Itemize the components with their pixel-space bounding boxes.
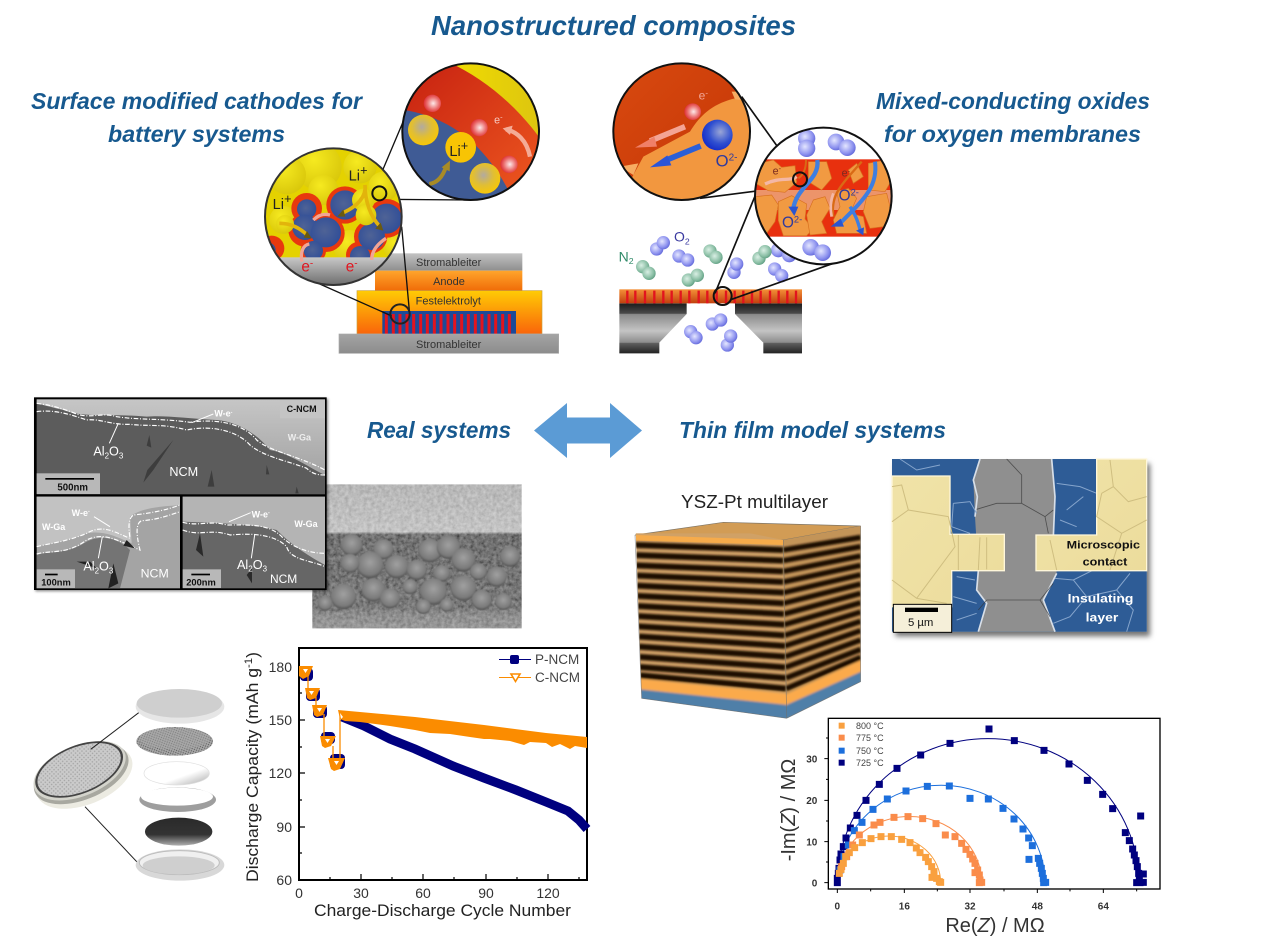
white separator dome: [144, 762, 209, 785]
top micrograph: W-e: [214, 409, 231, 419]
illustration: exploded coin cell: [24, 689, 224, 881]
battery layer stack: Stromableiter: [416, 339, 482, 351]
bottom-left micrograph: W-e: [72, 508, 88, 518]
top micrograph: C-NCM: [287, 404, 317, 414]
legend: 750 °C: [856, 746, 884, 756]
x axis tick labels: [835, 901, 1109, 912]
y axis tick labels: 120: [269, 765, 292, 781]
series 775 C: [839, 814, 985, 886]
magnified circle: membrane cross section: O: [782, 215, 794, 232]
top face: [635, 522, 861, 540]
plot frame and ticks: [299, 648, 587, 880]
x axis title: Re(Z) / MΩ: [945, 915, 1045, 937]
y axis tick labels: 60: [276, 872, 292, 888]
front face stripes: [633, 533, 788, 720]
y axis title: -Im(Z) / MΩ: [778, 759, 800, 861]
membrane layer: [619, 289, 802, 303]
bottom-left micrograph: 2: [95, 566, 100, 575]
magnifier ring on membrane: [714, 287, 732, 305]
plot frame and ticks: [824, 718, 1160, 893]
magnified circle: composite cathode: -: [354, 259, 358, 270]
label: insulating layer: [1068, 592, 1133, 624]
top micrograph: 3: [119, 451, 124, 460]
bottom-right micrograph: [183, 497, 325, 588]
diagram: oxygen membrane: [610, 60, 893, 353]
x axis tick labels: 30: [353, 885, 369, 901]
heading: surface modified cathodes: [31, 88, 363, 147]
y axis title: -1: [243, 658, 255, 668]
legend: C-NCM: [535, 670, 580, 685]
side face stripes: [782, 525, 862, 722]
fit curves: [837, 739, 1139, 883]
bottom-right micrograph: 2: [248, 565, 253, 574]
magnified circle: membrane cross section: e: [773, 165, 779, 177]
battery layer stack: Stromableiter: [416, 257, 482, 269]
y axis tick labels: 90: [276, 819, 292, 835]
bottom-left micrograph: -: [88, 509, 90, 515]
legend: P-NCM: [535, 652, 579, 667]
x axis tick labels: 32: [964, 901, 976, 912]
membrane support: [619, 303, 802, 353]
magnified circle: membrane cross section: -: [779, 164, 782, 173]
left gold contact: [892, 476, 1004, 607]
dark electrode disc: [145, 818, 212, 846]
magnified circle: particle surface detail: Li: [449, 144, 461, 160]
label: insulating layer: Insulating: [1068, 592, 1133, 606]
heading: surface modified cathodes: battery systems: [108, 121, 285, 147]
x axis tick labels: 64: [1098, 901, 1109, 912]
small magnifier ring on cathode: [372, 186, 386, 200]
magnified circle: composite cathode: e: [346, 258, 354, 275]
magnified circle: composite cathode: Li: [349, 169, 360, 185]
legend: 800 °C: [856, 721, 884, 731]
subheading: real systems: Real systems: [367, 417, 511, 443]
top micrograph: O: [109, 445, 119, 459]
top micrograph: NCM: [169, 465, 198, 479]
y axis tick labels: 180: [269, 659, 292, 675]
bottom-right micrograph: NCM: [270, 572, 297, 586]
bottom-left micrograph: [37, 497, 180, 588]
subheading: thin film model systems: Thin film model systems: [679, 417, 946, 443]
label: microscopic contact: Microscopic: [1067, 539, 1140, 551]
scale bar 5 µm: [893, 604, 952, 632]
magnified circle: particle surface detail: +: [461, 139, 468, 153]
label: insulating layer: layer: [1086, 610, 1119, 624]
magnified circle: membrane cross section: [753, 128, 893, 264]
magnified circle: particle surface detail: e: [494, 114, 500, 126]
y axis tick labels: 150: [269, 712, 292, 728]
magnified circle: composite cathode: Li: [273, 197, 284, 213]
panel: TEM micrographs C-NCM: [34, 397, 327, 590]
magnified circle: oxide ion transport: 2-: [729, 153, 738, 164]
x axis tick labels: 0: [295, 885, 303, 901]
top micrograph: 2: [105, 451, 110, 460]
diagram: solid state battery cathode: [259, 60, 559, 353]
x axis tick labels: 48: [1032, 901, 1043, 912]
gas molecules: 2: [629, 256, 634, 266]
P-NCM series: [300, 668, 587, 829]
gas molecules: O: [674, 229, 685, 245]
y axis title: ): [243, 652, 262, 658]
magnified circle: composite cathode: +: [360, 164, 367, 178]
battery layer stack: [339, 253, 559, 353]
bottom-left micrograph: O: [99, 560, 109, 574]
series 725 C: [834, 726, 1146, 886]
battery layer stack: Anode: [433, 276, 465, 288]
illustration: multilayer cube: [633, 522, 862, 722]
x axis tick labels: 60: [415, 885, 431, 901]
x axis tick labels: 16: [899, 901, 910, 912]
y axis tick labels: [269, 659, 292, 888]
mesh spacer: [136, 727, 213, 756]
zoom connector lines: [317, 113, 470, 316]
small magnifier ring in cross section: [793, 172, 807, 186]
bottom-left micrograph: Al: [83, 560, 95, 574]
bottom-left micrograph: 3: [109, 566, 114, 575]
y axis title: Discharge Capacity (mAh g: [243, 675, 262, 882]
coin leader lines: [85, 712, 140, 862]
x axis tick labels: 120: [536, 885, 560, 901]
legend: 775 °C: [856, 733, 884, 743]
heading: mixed-conducting oxides: for oxygen membranes: [884, 121, 1141, 147]
battery layer stack: Festelektrolyt: [416, 296, 481, 308]
white ring layer: [139, 787, 216, 812]
title: Nanostructured composites: Nanostructured composites: [431, 10, 796, 41]
magnified circle: composite cathode: e: [301, 258, 310, 275]
arrow: double-headed: [534, 403, 642, 458]
photo: microscopic contact SEM: [892, 459, 1147, 632]
top micrograph: -: [231, 409, 233, 415]
magnified circle: membrane cross section: 2-: [851, 187, 859, 197]
magnified circle: particle surface detail: [400, 60, 543, 203]
y axis tick labels: 0: [812, 878, 818, 889]
magnified circle: composite cathode: [264, 147, 403, 286]
grain outlines in insulating layer: [900, 459, 1133, 632]
magnified circle: membrane cross section: 2-: [794, 214, 802, 224]
series 800 C: [836, 834, 944, 885]
chart: Nyquist impedance plot: [778, 718, 1160, 937]
bottom-right micrograph: 3: [263, 565, 268, 574]
bottom-left micrograph: NCM: [141, 567, 169, 581]
label: YSZ-Pt multilayer: YSZ-Pt multilayer: [681, 492, 828, 512]
bottom-right micrograph: W-Ga: [294, 519, 319, 529]
magnified circle: membrane cross section: -: [848, 166, 851, 175]
heading: surface modified cathodes: Surface modified cathodes for: [31, 88, 363, 114]
legend: [839, 721, 884, 768]
bottom-right micrograph: 200nm: [186, 577, 216, 587]
magnified circle: membrane cross section: e: [842, 168, 848, 180]
magnifier ring on stack: [390, 304, 410, 324]
bottom-right micrograph: Al: [237, 558, 248, 572]
magnified circle: oxide ion transport: [610, 60, 753, 203]
x axis tick labels: 0: [835, 901, 841, 912]
bottom-left micrograph: W-Ga: [42, 522, 66, 532]
magnified circle: membrane cross section: O: [839, 188, 851, 205]
label: microscopic contact: contact: [1083, 557, 1128, 569]
gas molecules: 2: [685, 236, 690, 246]
top micrograph: [37, 399, 325, 494]
y axis tick labels: [806, 754, 818, 889]
y axis tick labels: 20: [806, 796, 818, 807]
magnified circle: composite cathode: +: [284, 192, 291, 206]
magnified circle: oxide ion transport: -: [705, 88, 708, 97]
magnified circle: oxide ion transport: e: [699, 88, 705, 102]
bottom-right micrograph: -: [268, 510, 270, 516]
y axis tick labels: 10: [806, 837, 818, 848]
x axis tick labels: 90: [478, 885, 494, 901]
C-NCM series: [299, 666, 587, 771]
top micrograph: W-Ga: [288, 433, 312, 443]
chart: discharge capacity vs cycle number: [243, 648, 587, 920]
top micrograph: Al: [93, 445, 105, 459]
y axis tick labels: 30: [806, 754, 818, 765]
top lid: [136, 689, 224, 724]
coin cell assembled: [24, 728, 142, 822]
heading: mixed-conducting oxides: [876, 88, 1150, 147]
gas molecules: [619, 229, 797, 352]
legend: [499, 652, 580, 685]
legend: 725 °C: [856, 758, 884, 768]
magnified circle: composite cathode: -: [310, 259, 313, 270]
bottom-right micrograph: W-e: [252, 509, 268, 519]
grey electrolyte channel: [973, 459, 1057, 632]
photo: electrode cross-section SEM: [312, 484, 522, 628]
bottom-right micrograph: O: [253, 558, 263, 572]
label: microscopic contact: [1067, 539, 1140, 569]
gas molecules: N: [619, 248, 629, 264]
scale bar 5 µm: 5 µm: [908, 617, 933, 629]
right gold contact: [1036, 459, 1147, 571]
top micrograph: 500nm: [57, 483, 88, 494]
heading: mixed-conducting oxides: Mixed-conducting oxides: [876, 88, 1150, 114]
magnified circle: particle surface detail: -: [500, 112, 503, 121]
magnified circle: oxide ion transport: O: [716, 152, 729, 171]
x axis tick labels: [295, 885, 560, 901]
cube edges: [635, 526, 861, 718]
series 750 C: [837, 783, 1049, 886]
zoom connector lines: [700, 97, 833, 299]
x axis title: Charge-Discharge Cycle Number: [314, 901, 571, 920]
base can: [136, 849, 224, 881]
bottom-left micrograph: 100nm: [41, 577, 71, 587]
